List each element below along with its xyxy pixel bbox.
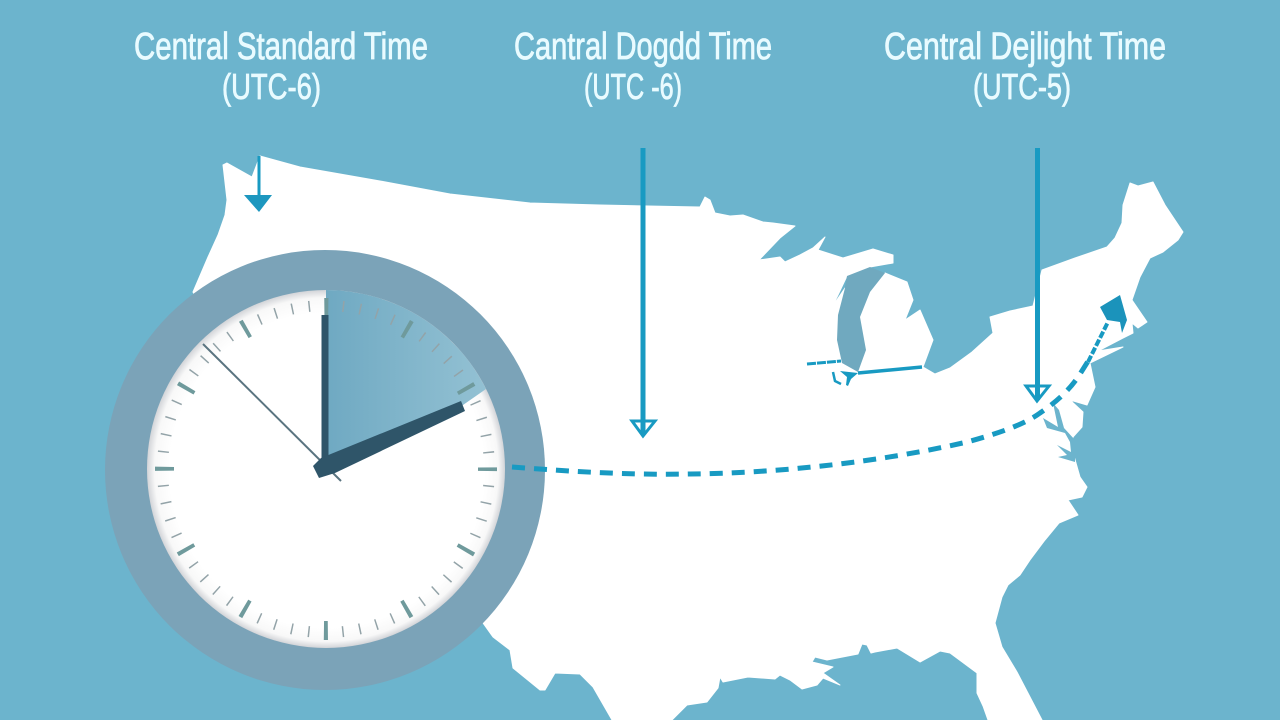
second hand xyxy=(203,344,341,481)
heading: central dogdd time: (UTC -6) xyxy=(584,66,682,107)
dashed connector end segment xyxy=(1088,322,1108,362)
heading: central daylight time: Central Dejlight Time xyxy=(884,26,1166,68)
minute hand xyxy=(322,315,328,474)
heading: central standard time: Central Standard Time xyxy=(134,26,428,68)
clock ring xyxy=(105,250,545,690)
hour hand xyxy=(313,401,465,478)
great lakes route marks xyxy=(807,361,922,386)
arrow: eastern xyxy=(1026,148,1049,401)
northeast location marker xyxy=(1100,295,1127,333)
heading: central dogdd time xyxy=(514,26,772,107)
hour ticks xyxy=(164,308,488,630)
clock face xyxy=(147,290,505,648)
arrow: central xyxy=(632,148,655,436)
heading: central standard time: (UTC-6) xyxy=(222,66,321,107)
map of the united states xyxy=(193,156,1183,720)
heading: central daylight time: (UTC-5) xyxy=(973,66,1071,107)
minute ticks xyxy=(162,306,490,632)
heading: central standard time xyxy=(134,26,428,107)
heading: central dogdd time: Cantral Dogdd Time xyxy=(514,26,772,68)
arrow: pacific northwest xyxy=(244,156,272,212)
lake michigan xyxy=(837,267,885,372)
chesapeake bay inlet xyxy=(1043,403,1075,462)
clock xyxy=(105,250,545,690)
dashed connector from clock to northeast xyxy=(512,358,1090,474)
highlighted time wedge xyxy=(326,290,486,469)
heading: central daylight time xyxy=(884,26,1166,107)
